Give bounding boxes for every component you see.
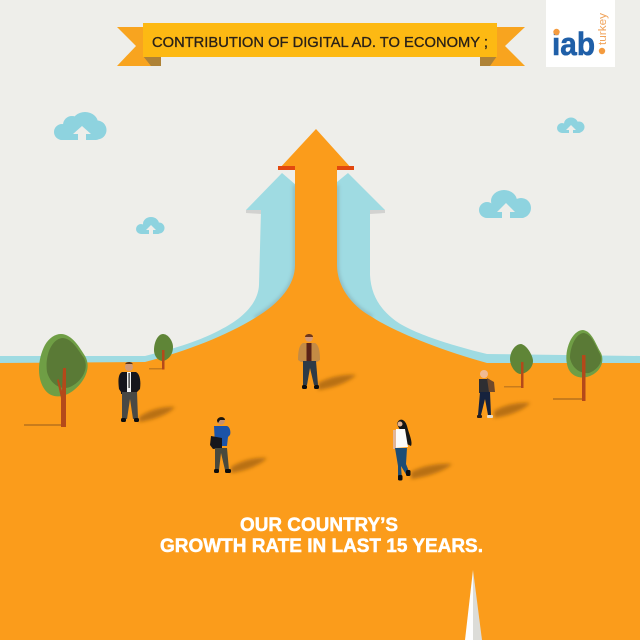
headline line 1: OUR COUNTRY’S: [240, 515, 398, 536]
person: man with blue shirt and bag: [210, 417, 267, 473]
banner ribbon: [117, 23, 525, 66]
tree: small right: [504, 344, 533, 388]
logo turkey label: turkey: [597, 12, 609, 45]
ground shadow: [411, 464, 452, 479]
tree: large right: [553, 330, 602, 401]
cloud: large right: [479, 190, 531, 218]
ground shadow: [318, 375, 356, 390]
headline line 2: GROWTH RATE IN LAST 15 YEARS.: [160, 536, 483, 557]
cloud: upper left: [54, 112, 106, 140]
main arrow and orange ground: [0, 129, 640, 640]
headline: [160, 515, 483, 557]
ground shadow: [231, 458, 267, 473]
logo: iab turkey: [546, 0, 615, 67]
side arrows: blue: [0, 173, 640, 370]
person: man in tan jacket: [298, 334, 356, 390]
tree: small left: [149, 334, 173, 370]
cloud: small left: [136, 217, 164, 234]
ribbon right tail: [480, 27, 525, 66]
white spike arrow tip: [465, 570, 482, 640]
ground shadow: [494, 403, 530, 418]
ribbon folds: [143, 56, 497, 66]
ribbon left tail: [117, 27, 160, 66]
banner band: [143, 23, 497, 57]
logo wordmark: iab: [552, 26, 595, 62]
person: bald man with backpack: [477, 370, 530, 418]
arrow head red accents: [278, 166, 354, 170]
ground shadow: [139, 407, 175, 422]
cloud: small right: [557, 118, 584, 133]
tree: large left: [24, 334, 88, 427]
person: man in black suit: [118, 362, 175, 422]
banner title: CONTRIBUTION OF DIGITAL AD. TO ECONOMY ;: [152, 35, 488, 51]
person: woman in white top: [393, 420, 452, 480]
